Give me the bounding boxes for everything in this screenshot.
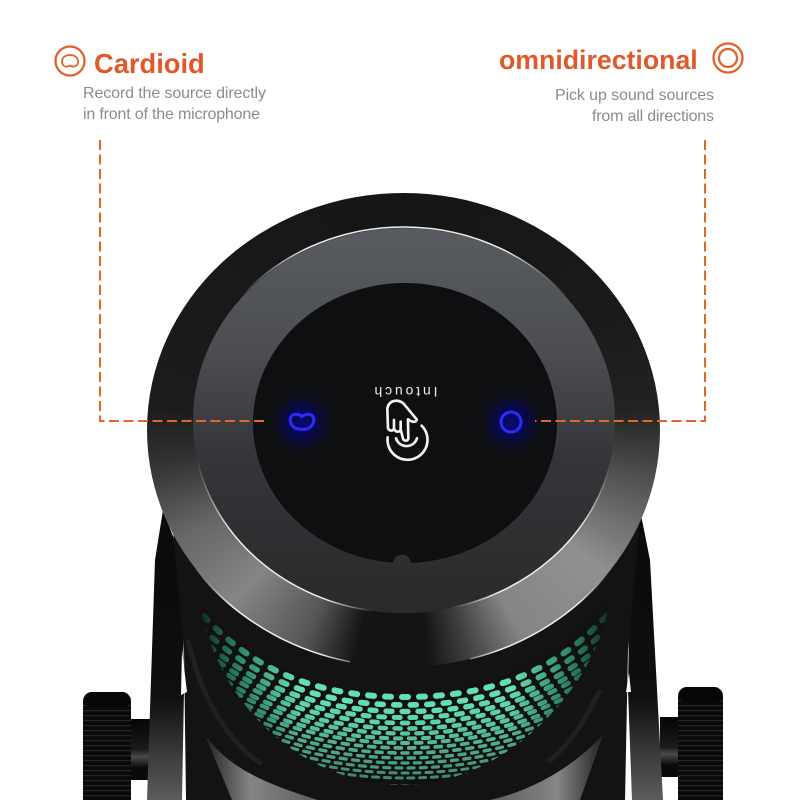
cardioid LED indicator: [266, 386, 338, 458]
ring highlights: [168, 227, 640, 662]
upside-down Intouch label: Intouch: [374, 384, 438, 400]
left stand arm: [147, 510, 184, 800]
omnidirectional icon: [714, 44, 742, 72]
omnidirectional description: [555, 87, 714, 125]
omnidirectional dashed leader line: [535, 140, 705, 421]
omnidirectional description: Pick up sound sources: [555, 87, 714, 104]
glowing green mesh grille: [202, 613, 608, 785]
cardioid dashed leader line: [100, 140, 268, 421]
touch hand icon: [387, 401, 427, 460]
cardioid description: in front of the microphone: [83, 106, 260, 123]
microphone body, stand and grille: [83, 511, 723, 800]
right knob: [660, 687, 723, 800]
cardioid description: Record the source directly: [83, 85, 266, 102]
panel notch: [393, 555, 411, 563]
cardioid icon: [56, 46, 84, 76]
right stand arm: [628, 510, 663, 800]
microphone body: [172, 520, 640, 800]
microphone head outer rim: [147, 193, 660, 667]
grey top ring: [193, 228, 615, 613]
lower body sheen: [205, 735, 603, 800]
white gaps beside arms: [181, 650, 631, 695]
cardioid heading: Cardioid: [94, 48, 205, 79]
left knob: [83, 692, 151, 800]
grille frame highlight: [188, 640, 600, 764]
black touch panel: [253, 283, 557, 563]
omnidirectional heading: omnidirectional: [499, 45, 698, 75]
omnidirectional description: from all directions: [592, 108, 714, 125]
omnidirectional LED indicator: [475, 386, 547, 458]
cardioid description: [83, 85, 266, 123]
